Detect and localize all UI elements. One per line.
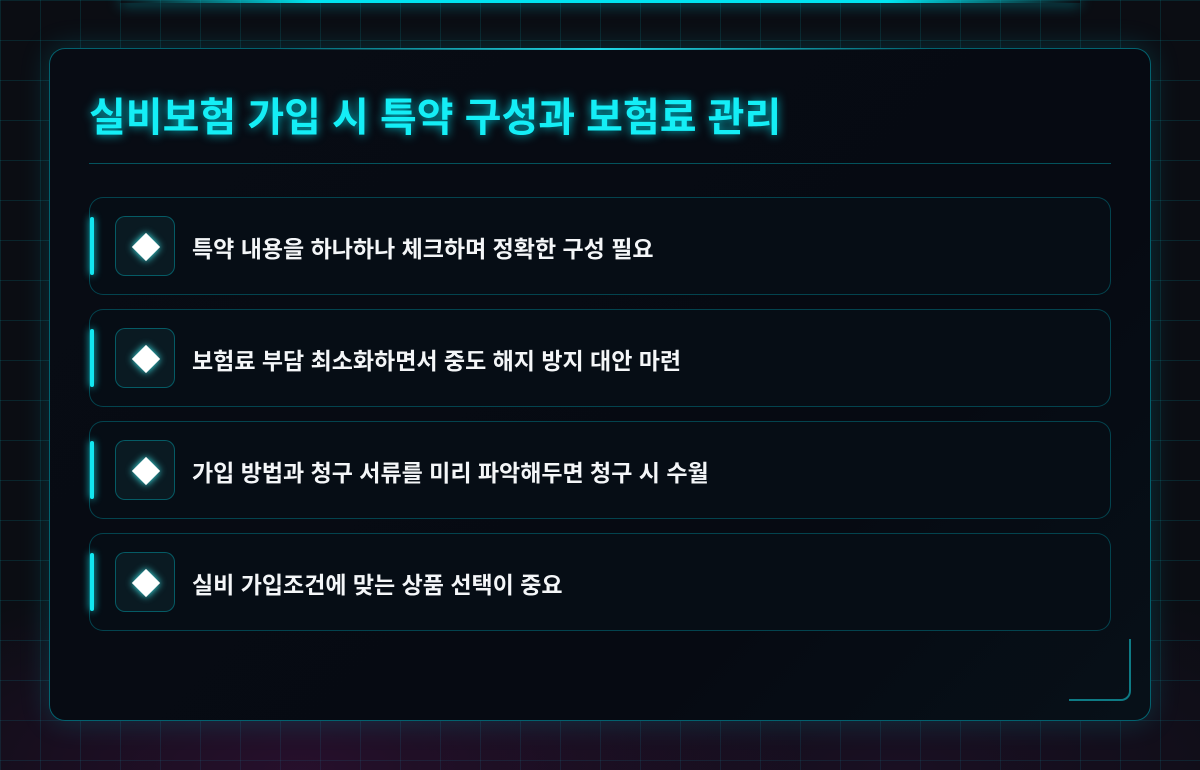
icon: diamond [115,440,175,500]
item 2 [89,309,1111,407]
icon: diamond [115,216,175,276]
item 1: 특약 내용을 하나하나 체크하며 정확한 구성 필요 [192,236,654,262]
item 4 [89,533,1111,631]
corner bracket [1069,639,1131,701]
item 2: 보험료 부담 최소화하면서 중도 해지 방지 대안 마련 [192,348,681,374]
icon: diamond [115,552,175,612]
item 4: 실비 가입조건에 맞는 상품 선택이 중요 [192,572,563,598]
item 3: 가입 방법과 청구 서류를 미리 파악해두면 청구 시 수월 [192,460,709,486]
icon: diamond [115,328,175,388]
item 1 [89,197,1111,295]
item 3 [89,421,1111,519]
title: 실비보험 가입 시 특약 구성과 보험료 관리 [89,96,781,140]
